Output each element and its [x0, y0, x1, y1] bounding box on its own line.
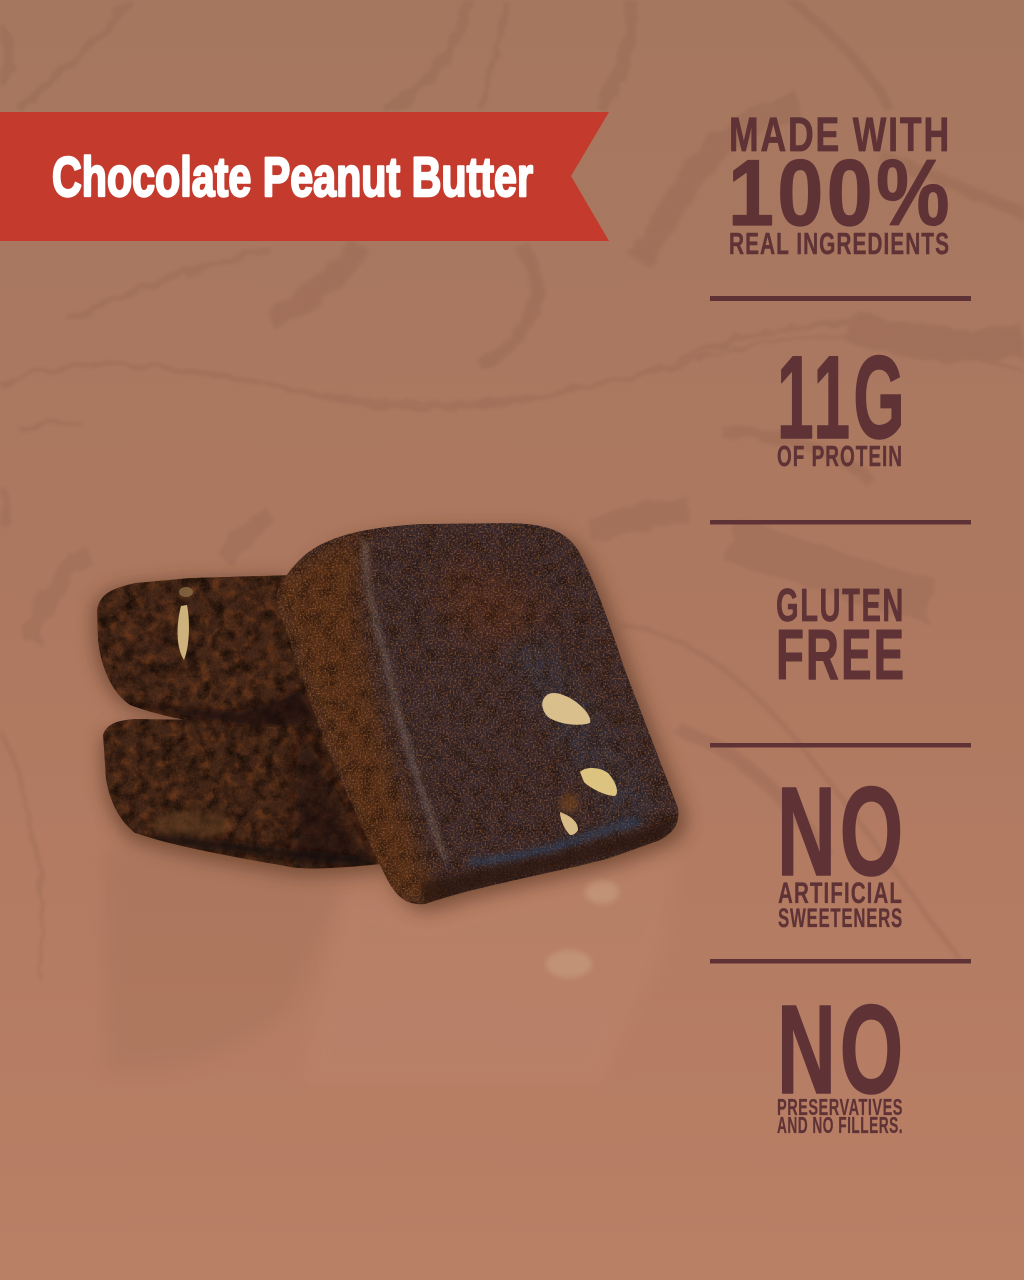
claim: no preservatives and no fillers: NO [777, 979, 907, 1120]
brownie highlights [365, 540, 445, 860]
ribbon banner [0, 112, 609, 241]
claim: 11g of protein: 11G [777, 332, 908, 464]
claim: no preservatives and no fillers [777, 979, 907, 1138]
brownie side edge [277, 532, 436, 904]
claim: made with 100% real ingredients [728, 109, 953, 261]
claim: no artificial sweeteners: SWEETENERS [778, 903, 903, 933]
peanut pieces [542, 693, 590, 725]
claim: gluten free [776, 579, 906, 695]
claim: no artificial sweeteners: NO [777, 761, 907, 902]
claim: no preservatives and no fillers: AND NO FILLERS. [777, 1112, 903, 1138]
claim: made with 100% real ingredients: 100% [728, 140, 953, 245]
shadow [93, 529, 686, 910]
background swirl pattern [0, 0, 1024, 980]
brownie reflection [105, 849, 680, 1085]
banner title: Chocolate Peanut Butter [52, 145, 533, 208]
claim: no artificial sweeteners [777, 761, 907, 933]
brownies photo [93, 523, 686, 910]
brownie: front leaning [265, 523, 678, 910]
brownie: top back [97, 575, 340, 728]
claim: gluten free: FREE [776, 616, 906, 695]
claim: 11g of protein: OF PROTEIN [777, 441, 903, 473]
claims column [710, 109, 971, 1138]
claim: 11g of protein [777, 332, 908, 473]
claim: no preservatives and no fillers: PRESERVATIVES [777, 1094, 903, 1120]
claim: made with 100% real ingredients: MADE WITH [729, 109, 951, 162]
claim: no artificial sweeteners: ARTIFICIAL [778, 877, 903, 910]
claim: gluten free: GLUTEN [776, 579, 905, 631]
brownie: bottom back [103, 719, 400, 870]
